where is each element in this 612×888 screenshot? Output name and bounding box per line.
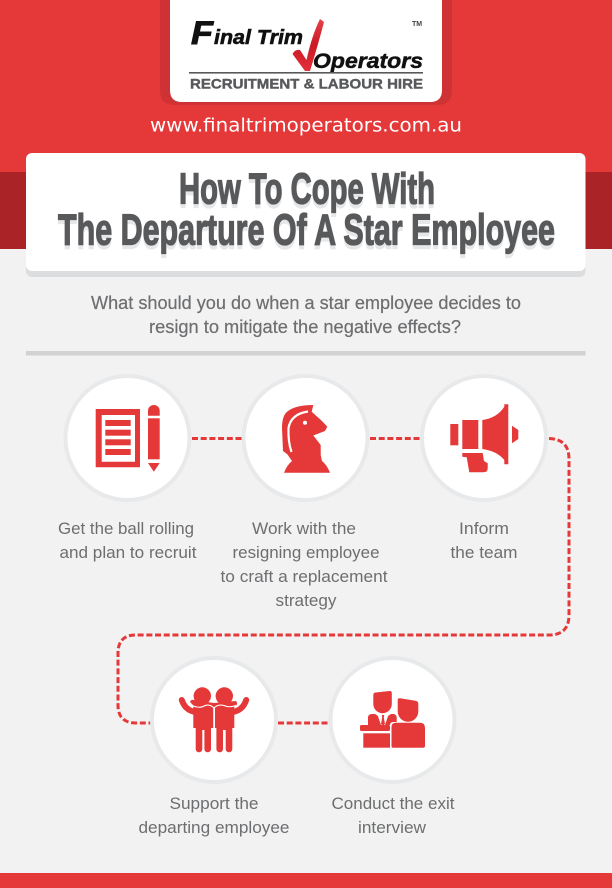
step 2: replacement strategy (220, 376, 388, 610)
label (138, 795, 290, 837)
label: resigning employee (232, 544, 380, 562)
label: Work with the (252, 520, 356, 538)
step 5: exit interview (330, 658, 455, 837)
icon: megaphone (450, 404, 518, 472)
label: Support the (170, 795, 258, 813)
header band (0, 0, 612, 249)
step 3: inform the team (422, 376, 546, 562)
icon: interview at desk (360, 691, 425, 748)
icon: chess knight (282, 405, 330, 473)
label (332, 795, 455, 837)
logo panel: inal Trim (214, 26, 303, 49)
step 4: support departing employee (138, 658, 290, 837)
step 1: plan to recruit (58, 376, 197, 562)
intro text: What should you do when a star employee decides to (91, 293, 521, 313)
label (58, 520, 197, 562)
website url: www.finaltrimoperators.com.au (150, 114, 462, 136)
label: Conduct the exit (332, 795, 455, 813)
label: interview (358, 819, 426, 837)
label: to craft a replacement (220, 568, 388, 586)
label: and plan to recruit (60, 544, 197, 562)
label: departing employee (138, 819, 290, 837)
label (450, 520, 518, 562)
title: How To Cope With (179, 164, 435, 214)
footer band (0, 873, 612, 888)
logo panel (160, 0, 452, 105)
intro text: resign to mitigate the negative effects? (149, 317, 461, 337)
label: Get the ball rolling (58, 520, 194, 538)
logo panel: RECRUITMENT & LABOUR HIRE (190, 76, 423, 92)
intro text (91, 293, 521, 337)
title: How To Cope With (179, 168, 435, 218)
logo panel: Operators (313, 49, 423, 73)
icon: two people embracing (182, 687, 246, 752)
logo panel: TM (412, 21, 422, 28)
title card (26, 153, 586, 277)
label (220, 520, 388, 610)
label: Inform (459, 520, 509, 538)
logo panel: F (191, 15, 215, 51)
dashed connector path (118, 438, 569, 723)
title (58, 164, 555, 258)
label: strategy (276, 592, 337, 610)
icon: document and pencil (96, 405, 160, 472)
label: the team (450, 544, 518, 562)
